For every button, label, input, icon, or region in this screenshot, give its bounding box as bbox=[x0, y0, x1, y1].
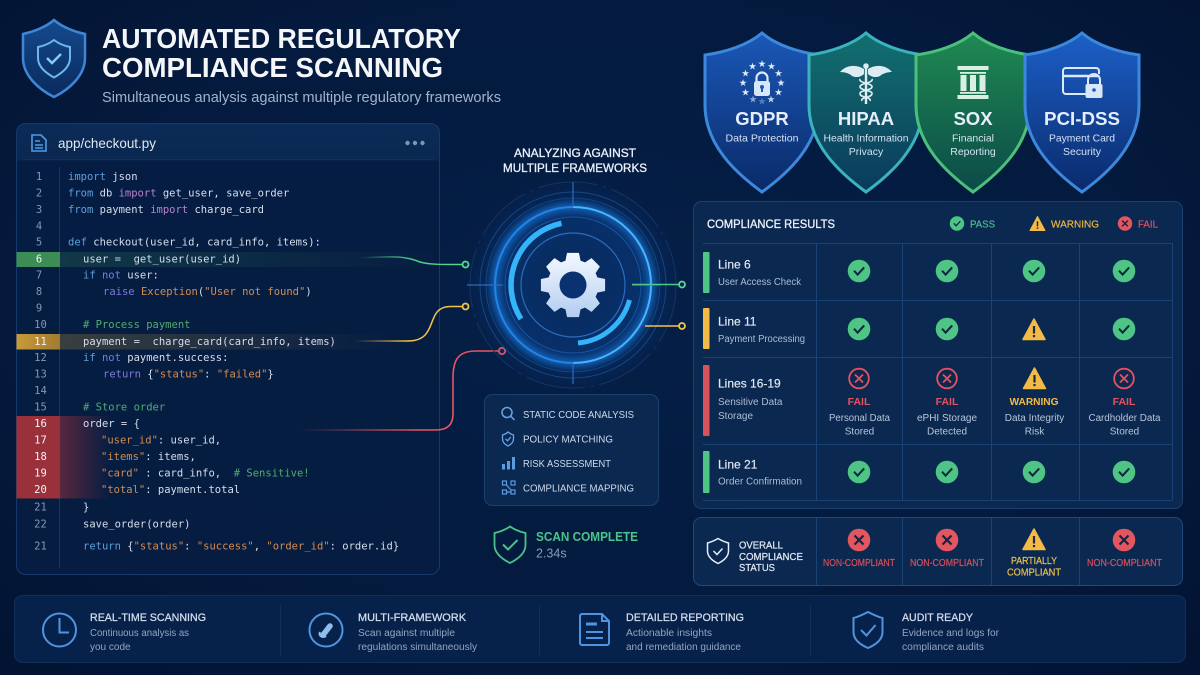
connector: line 11 to gauge bbox=[355, 304, 468, 341]
shield: PCI-DSS: Payment Card bbox=[1049, 132, 1115, 144]
shield: GDPR bbox=[705, 33, 819, 192]
line numbers: 20 bbox=[34, 484, 47, 496]
line numbers: 12 bbox=[34, 352, 47, 364]
row: line 21: Line 21 bbox=[718, 458, 758, 472]
gauge: scanning engine bbox=[465, 177, 685, 393]
feature: real-time scanning bbox=[43, 612, 206, 653]
feature: detailed reporting: and remediation guidance bbox=[626, 642, 741, 653]
shield: GDPR: ★ bbox=[758, 59, 767, 70]
label: policy matching: POLICY MATCHING bbox=[523, 434, 613, 446]
row: line 6: Line 6 bbox=[718, 258, 751, 272]
row: lines 16-19: Stored bbox=[845, 426, 874, 438]
line numbers: 17 bbox=[34, 435, 47, 447]
line numbers: 9 bbox=[36, 302, 42, 314]
shield: HIPAA: Health Information bbox=[824, 132, 909, 144]
code text: return {"status": "failed"} bbox=[103, 368, 274, 380]
line numbers: 21 bbox=[34, 502, 47, 514]
shield: SOX: Financial bbox=[952, 132, 994, 144]
title: AUTOMATED REGULATORY bbox=[102, 23, 461, 54]
shield: HIPAA: HIPAA bbox=[838, 108, 894, 129]
status: SOX: COMPLIANT bbox=[1007, 568, 1061, 578]
header bbox=[23, 20, 501, 106]
label: overall bbox=[739, 540, 803, 574]
row: lines 16-19: Cardholder Data bbox=[1088, 413, 1161, 424]
feature: detailed reporting bbox=[580, 612, 744, 653]
panel: overall status bbox=[694, 518, 1182, 586]
shield: GDPR: ★ bbox=[758, 96, 767, 108]
menu dots bbox=[405, 141, 425, 145]
row: lines 16-19: FAIL bbox=[936, 396, 959, 408]
row: line 11 bbox=[703, 308, 1135, 349]
icon: overall shield bbox=[708, 538, 728, 564]
line numbers: 4 bbox=[36, 220, 42, 232]
row: lines 16-19: Personal Data bbox=[829, 413, 890, 424]
shield: GDPR: Data Protection bbox=[726, 132, 799, 144]
icon: search bbox=[502, 408, 514, 420]
row: line 11: Payment Processing bbox=[718, 334, 805, 345]
row: line 21 bbox=[703, 451, 1135, 493]
code text: save_order(order) bbox=[83, 518, 190, 530]
connector: right green bbox=[632, 282, 685, 288]
row: lines 16-19: Sensitive Data bbox=[718, 397, 783, 408]
shield: PCI-DSS bbox=[1025, 33, 1139, 192]
scan label: SCAN COMPLETE bbox=[536, 530, 638, 544]
code text: user = get_user(user_id) bbox=[83, 254, 241, 266]
feature: multi-framework: MULTI-FRAMEWORK bbox=[358, 612, 467, 624]
icon: mapping bbox=[502, 481, 515, 494]
feature: real-time scanning: Continuous analysis as bbox=[90, 628, 189, 639]
line numbers: 15 bbox=[34, 402, 47, 414]
connector: right yellow bbox=[645, 323, 685, 329]
shield: SOX: Reporting bbox=[950, 146, 996, 158]
feature: audit ready: AUDIT READY bbox=[902, 612, 974, 624]
shield: GDPR: ★ bbox=[777, 78, 786, 89]
code text: if not payment.success: bbox=[83, 352, 228, 364]
icon: gear bbox=[542, 254, 604, 316]
feature: detailed reporting: DETAILED REPORTING bbox=[626, 612, 744, 624]
code text: "card" : card_info, # Sensitive! bbox=[101, 468, 310, 480]
shield: GDPR: ★ bbox=[767, 62, 776, 72]
panel: feature footer bbox=[14, 596, 1186, 662]
code text: def checkout(user_id, card_info, items): bbox=[68, 237, 321, 249]
code text bbox=[68, 171, 399, 552]
icon: file bbox=[32, 135, 46, 151]
code text: "total": payment.total bbox=[101, 484, 240, 496]
filename: app/checkout.py bbox=[58, 135, 156, 151]
code text: # Store order bbox=[83, 402, 165, 414]
subtitle: Simultaneous analysis against multiple regulatory frameworks bbox=[102, 90, 501, 106]
row: line 11: Line 11 bbox=[718, 314, 757, 328]
shield: GDPR: ★ bbox=[741, 68, 750, 80]
shield: GDPR: GDPR bbox=[735, 108, 789, 129]
icon: bars bbox=[502, 457, 515, 470]
line numbers: 14 bbox=[34, 385, 47, 397]
heading: analyzing: MULTIPLE FRAMEWORKS bbox=[503, 161, 647, 175]
shield: HIPAA bbox=[809, 33, 923, 192]
status: HIPAA bbox=[910, 529, 984, 569]
shield: GDPR: ★ bbox=[741, 88, 750, 98]
feature: detailed reporting: Actionable insights bbox=[626, 628, 712, 639]
connector: lines 16-19 to gauge bbox=[300, 348, 505, 430]
row: lines 16-19: WARNING bbox=[1010, 396, 1058, 408]
line numbers bbox=[34, 171, 47, 552]
legend: PASS bbox=[970, 218, 995, 230]
row: lines 16-19: Risk bbox=[1025, 426, 1045, 438]
row: lines 16-19: FAIL bbox=[1113, 396, 1136, 408]
shield: PCI-DSS: Security bbox=[1063, 146, 1102, 158]
feature: audit ready: compliance audits bbox=[902, 642, 984, 653]
line numbers: 2 bbox=[36, 188, 42, 200]
heading: analyzing bbox=[503, 146, 647, 175]
row: lines 16-19: Stored bbox=[1110, 426, 1139, 438]
shield: HIPAA: Privacy bbox=[849, 146, 884, 158]
feature: multi-framework bbox=[310, 612, 477, 653]
shield: GDPR: ★ bbox=[774, 88, 783, 98]
feature: multi-framework: Scan against multiple bbox=[358, 628, 455, 639]
icon: policy shield bbox=[502, 432, 514, 446]
feature: multi-framework: regulations simultaneously bbox=[358, 642, 477, 653]
line numbers: 8 bbox=[36, 286, 42, 298]
status: SOX bbox=[1007, 529, 1061, 578]
title bbox=[102, 23, 461, 83]
scan complete bbox=[494, 526, 638, 563]
line numbers: 6 bbox=[36, 254, 42, 266]
line numbers: 13 bbox=[34, 368, 47, 380]
line numbers: 7 bbox=[36, 270, 42, 282]
highlight: line 11 bbox=[16, 334, 390, 350]
status: PCI-DSS: NON-COMPLIANT bbox=[1087, 558, 1162, 569]
status: GDPR: NON-COMPLIANT bbox=[823, 558, 895, 569]
shield: GDPR: ★ bbox=[749, 94, 758, 106]
status: GDPR bbox=[823, 529, 895, 569]
shield: GDPR: ★ bbox=[748, 62, 757, 72]
line numbers: 19 bbox=[34, 468, 47, 480]
label: overall: OVERALL bbox=[739, 540, 783, 552]
code text: from db import get_user, save_order bbox=[68, 188, 289, 200]
legend bbox=[950, 216, 1158, 231]
highlight: lines 16-20 bbox=[16, 416, 110, 498]
code text: from payment import charge_card bbox=[68, 204, 264, 216]
label: overall: COMPLIANCE bbox=[739, 551, 803, 563]
code text: raise Exception("User not found") bbox=[103, 286, 312, 298]
line numbers: 21 bbox=[34, 540, 47, 552]
feature: real-time scanning: you code bbox=[90, 642, 131, 653]
row: lines 16-19 bbox=[703, 365, 1161, 438]
shield: PCI-DSS: PCI-DSS bbox=[1044, 108, 1120, 129]
code text: "items": items, bbox=[101, 451, 196, 463]
code text: if not user: bbox=[83, 270, 159, 282]
label: overall: STATUS bbox=[739, 562, 775, 574]
label: static code analysis: STATIC CODE ANALYSIS bbox=[523, 409, 634, 421]
shield: GDPR: ★ bbox=[774, 68, 783, 80]
line numbers: 1 bbox=[36, 171, 42, 183]
scan time: 2.34s bbox=[536, 546, 567, 560]
legend: FAIL bbox=[1138, 218, 1158, 230]
shield: SOX: SOX bbox=[953, 108, 993, 129]
row: lines 16-19: Data Integrity bbox=[1005, 413, 1064, 424]
code text: import json bbox=[68, 171, 138, 183]
status: SOX: PARTIALLY bbox=[1011, 556, 1057, 567]
line numbers: 16 bbox=[34, 418, 47, 430]
status: HIPAA: NON-COMPLIANT bbox=[910, 558, 984, 569]
line numbers: 18 bbox=[34, 451, 47, 463]
row: line 6 bbox=[703, 252, 1135, 293]
label: compliance mapping: COMPLIANCE MAPPING bbox=[523, 482, 634, 494]
row: lines 16-19: Storage bbox=[718, 411, 753, 422]
feature: real-time scanning: REAL-TIME SCANNING bbox=[90, 612, 206, 624]
feature: audit ready: Evidence and logs for bbox=[902, 628, 1000, 639]
panel: compliance results bbox=[694, 202, 1182, 508]
panel: code editor bbox=[16, 124, 440, 574]
icon: header shield bbox=[23, 20, 85, 97]
line numbers: 11 bbox=[34, 336, 47, 348]
row: line 21: Order Confirmation bbox=[718, 476, 802, 488]
highlight: line 6 bbox=[16, 252, 440, 267]
connector: line 6 to gauge bbox=[360, 257, 468, 268]
line numbers: 10 bbox=[34, 319, 47, 331]
shields: frameworks bbox=[705, 33, 1139, 192]
row: lines 16-19: Lines 16-19 bbox=[718, 376, 781, 390]
code text: } bbox=[83, 502, 89, 514]
title: COMPLIANCE SCANNING bbox=[102, 52, 443, 83]
row: lines 16-19: ePHI Storage bbox=[917, 413, 977, 424]
label: risk assessment: RISK ASSESSMENT bbox=[523, 458, 612, 470]
code text: "user_id": user_id, bbox=[101, 435, 221, 447]
row: lines 16-19: Detected bbox=[927, 426, 967, 438]
shield: SOX bbox=[916, 33, 1030, 192]
row: lines 16-19: FAIL bbox=[848, 396, 871, 408]
code text: payment = charge_card(card_info, items) bbox=[83, 336, 336, 348]
feature: audit ready bbox=[854, 612, 1000, 653]
shield: GDPR: ★ bbox=[767, 94, 776, 106]
panel: analysis steps bbox=[484, 394, 658, 506]
code text: order = { bbox=[83, 418, 140, 430]
icon: scan shield bbox=[494, 526, 526, 563]
line numbers: 22 bbox=[34, 518, 47, 530]
shield: GDPR: ★ bbox=[739, 78, 748, 89]
status: PCI-DSS bbox=[1087, 529, 1162, 569]
legend: WARNING bbox=[1051, 218, 1099, 230]
line numbers: 3 bbox=[36, 204, 42, 216]
code text: return {"status": "success", "order_id": order.id} bbox=[83, 540, 399, 552]
heading: analyzing: ANALYZING AGAINST bbox=[514, 146, 637, 160]
line numbers: 5 bbox=[36, 237, 42, 249]
heading: results: COMPLIANCE RESULTS bbox=[707, 217, 835, 231]
row: line 6: User Access Check bbox=[718, 277, 802, 288]
code text: # Process payment bbox=[83, 319, 190, 331]
